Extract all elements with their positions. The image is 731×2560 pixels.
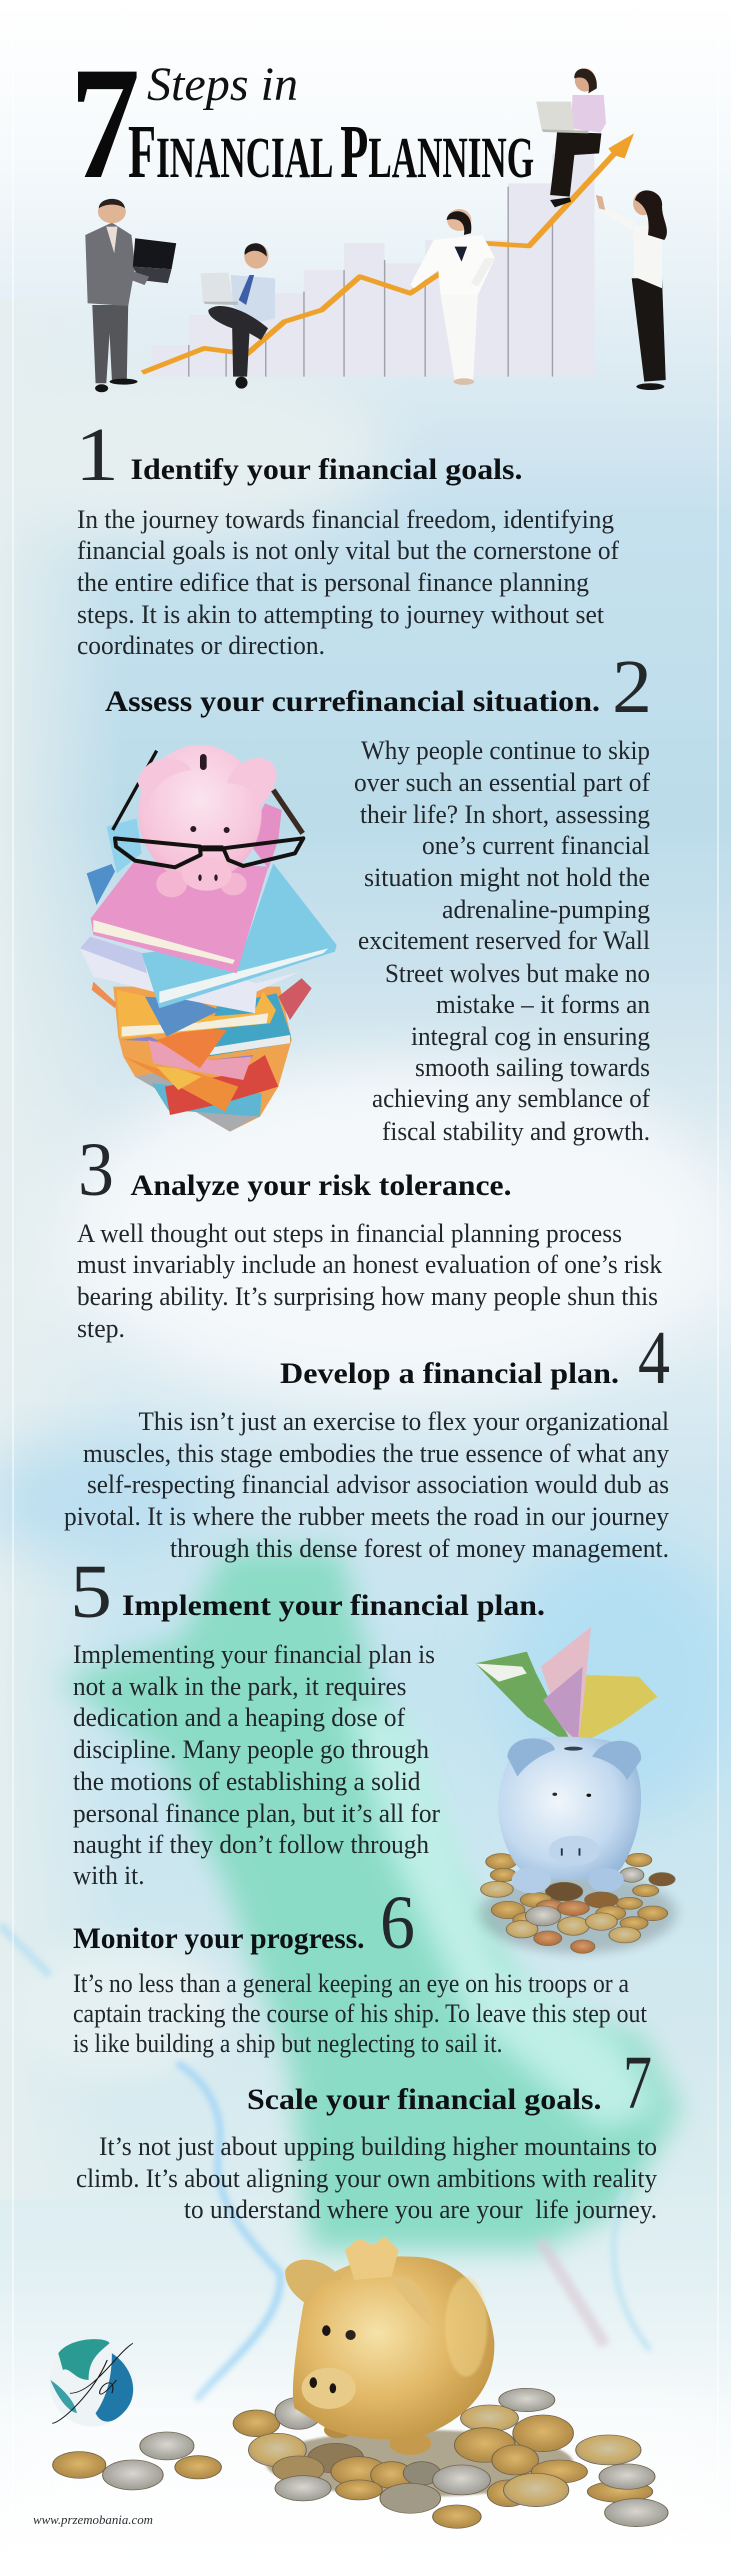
pink book <box>91 803 282 973</box>
body 2: their life? In short, assessing <box>360 800 650 829</box>
step 4 <box>64 1316 670 1563</box>
body 3: bearing ability. It’s surprising how many people shun this <box>77 1282 658 1311</box>
numeral 5: 5 <box>70 1550 112 1634</box>
body 3: A well thought out steps in financial planning process <box>77 1219 622 1248</box>
logo: globe with signature <box>49 2339 135 2427</box>
body 1: steps. It is akin to attempting to journey without set <box>77 600 605 629</box>
body 6: captain tracking the course of his ship. To leave this step out <box>73 1999 648 2028</box>
man in grey suit with laptop <box>85 199 176 392</box>
body 7: climb. It’s about aligning your own ambitions with reality <box>76 2164 657 2193</box>
body 4 <box>64 1407 669 1563</box>
body 2: mistake – it forms an <box>436 990 650 1019</box>
body 6 <box>73 1969 648 2058</box>
blue and pale blue back books <box>87 864 115 905</box>
light blue book <box>142 863 337 1008</box>
step 3 <box>77 1128 662 1343</box>
heading 5: Implement your financial plan. <box>122 1589 545 1622</box>
body 4: through this dense forest of money management. <box>170 1534 669 1563</box>
numeral 1: 1 <box>75 413 119 497</box>
body 1: the entire edifice that is personal finance planning <box>77 568 589 597</box>
body 2: situation might not hold the <box>364 863 650 892</box>
heading 1: Identify your financial goals. <box>130 453 522 486</box>
body 7: It’s not just about upping building higher mountains to <box>99 2132 657 2161</box>
body 2: adrenaline-pumping <box>442 895 650 924</box>
body 3: step. <box>77 1314 125 1343</box>
glasses arm behind pig <box>113 751 157 830</box>
coin pile front <box>273 2443 668 2528</box>
step 6 <box>73 1881 648 2058</box>
title line: Financial Planning: FINANCIAL PLANNING <box>128 110 534 194</box>
loose coins <box>53 2432 221 2490</box>
book stack <box>80 937 312 1132</box>
woman standing with raised hand <box>596 190 667 390</box>
website url: www.przemobania.com <box>33 2512 153 2527</box>
body 1 <box>77 505 619 660</box>
body 5: Implementing your financial plan is <box>73 1640 435 1669</box>
seated man with white laptop <box>200 243 275 389</box>
body 2: one’s current financial <box>422 831 650 860</box>
body 2: integral cog in ensuring <box>411 1022 650 1051</box>
illustration: pink piggy bank with glasses on book stack <box>80 745 337 1132</box>
body 1: financial goals is not only vital but the cornerstone of <box>77 536 619 565</box>
body 4: This isn’t just an exercise to flex your organizational <box>138 1407 669 1436</box>
title line: Steps in: Steps in <box>147 58 298 111</box>
body 3: must invariably include an honest evaluation of one’s risk <box>77 1250 662 1279</box>
body 5: with it. <box>73 1861 144 1890</box>
numeral 3: 3 <box>78 1128 114 1212</box>
banknotes <box>476 1627 657 1747</box>
body 2: smooth sailing towards <box>415 1053 650 1082</box>
heading 7: Scale your financial goals. <box>247 2083 602 2116</box>
illustration: blue piggy bank with banknotes on coins <box>476 1627 676 1953</box>
title <box>70 34 534 212</box>
step 7 <box>76 2041 657 2224</box>
body 4: self-respecting financial advisor association would dub as <box>87 1470 669 1499</box>
body 5: dedication and a heaping dose of <box>73 1703 405 1732</box>
body 5: not a walk in the park, it requires <box>73 1672 406 1701</box>
piggy bank <box>137 745 277 897</box>
pig body <box>498 1737 641 1893</box>
body 2: achieving any semblance of <box>372 1084 650 1113</box>
numeral 6: 6 <box>380 1881 415 1965</box>
body 7 <box>76 2132 657 2224</box>
body 2: fiscal stability and growth. <box>382 1117 650 1146</box>
heading 2: Assess your currefinancial situation. <box>105 685 600 718</box>
body 5: discipline. Many people go through <box>73 1735 429 1764</box>
numeral 7: 7 <box>623 2041 652 2125</box>
hero illustration: team on rising bar chart <box>85 68 667 392</box>
glasses <box>115 790 303 867</box>
step 1 <box>75 413 619 660</box>
body 2 <box>354 736 650 1146</box>
gold pig <box>285 2237 494 2455</box>
title numeral 7: 7 <box>70 34 140 212</box>
heading 6: Monitor your progress. <box>73 1922 364 1955</box>
body 2: Street wolves but make no <box>385 959 650 988</box>
body 3 <box>77 1219 662 1343</box>
heading 4: Develop a financial plan. <box>280 1357 619 1390</box>
coin pile <box>480 1853 676 1953</box>
body 1: In the journey towards financial freedom, identifying <box>77 505 614 534</box>
heading 3: Analyze your risk tolerance. <box>130 1169 512 1202</box>
coin pile back <box>233 2388 641 2497</box>
body 4: pivotal. It is where the rubber meets the road in our journey <box>64 1502 669 1531</box>
body 5: personal finance plan, but it’s all for <box>73 1799 440 1828</box>
body 2: over such an essential part of <box>354 768 650 797</box>
numeral 4: 4 <box>638 1316 670 1400</box>
body 7: to understand where you are your life journey. <box>184 2195 657 2224</box>
body 2: Why people continue to skip <box>361 736 650 765</box>
body 5 <box>73 1640 440 1890</box>
body 1: coordinates or direction. <box>77 631 325 660</box>
step 2 <box>105 645 652 1146</box>
rising orange arrow <box>142 133 634 373</box>
body 4: muscles, this stage embodies the true essence of what any <box>83 1439 669 1468</box>
bar chart <box>152 153 594 377</box>
woman in white suit <box>410 209 495 385</box>
numeral 2: 2 <box>612 645 652 729</box>
woman seated on top bar with laptop <box>536 68 606 207</box>
body 6: It’s no less than a general keeping an eye on his troops or a <box>73 1969 629 1998</box>
body 6: is like building a ship but neglecting to sail it. <box>73 2029 502 2058</box>
step 5 <box>70 1550 545 1890</box>
body 5: naught if they don’t follow through <box>73 1830 429 1859</box>
body 5: the motions of establishing a solid <box>73 1767 420 1796</box>
body 2: excitement reserved for Wall <box>358 926 650 955</box>
illustration: gold piggy bank on coins <box>53 2237 668 2528</box>
